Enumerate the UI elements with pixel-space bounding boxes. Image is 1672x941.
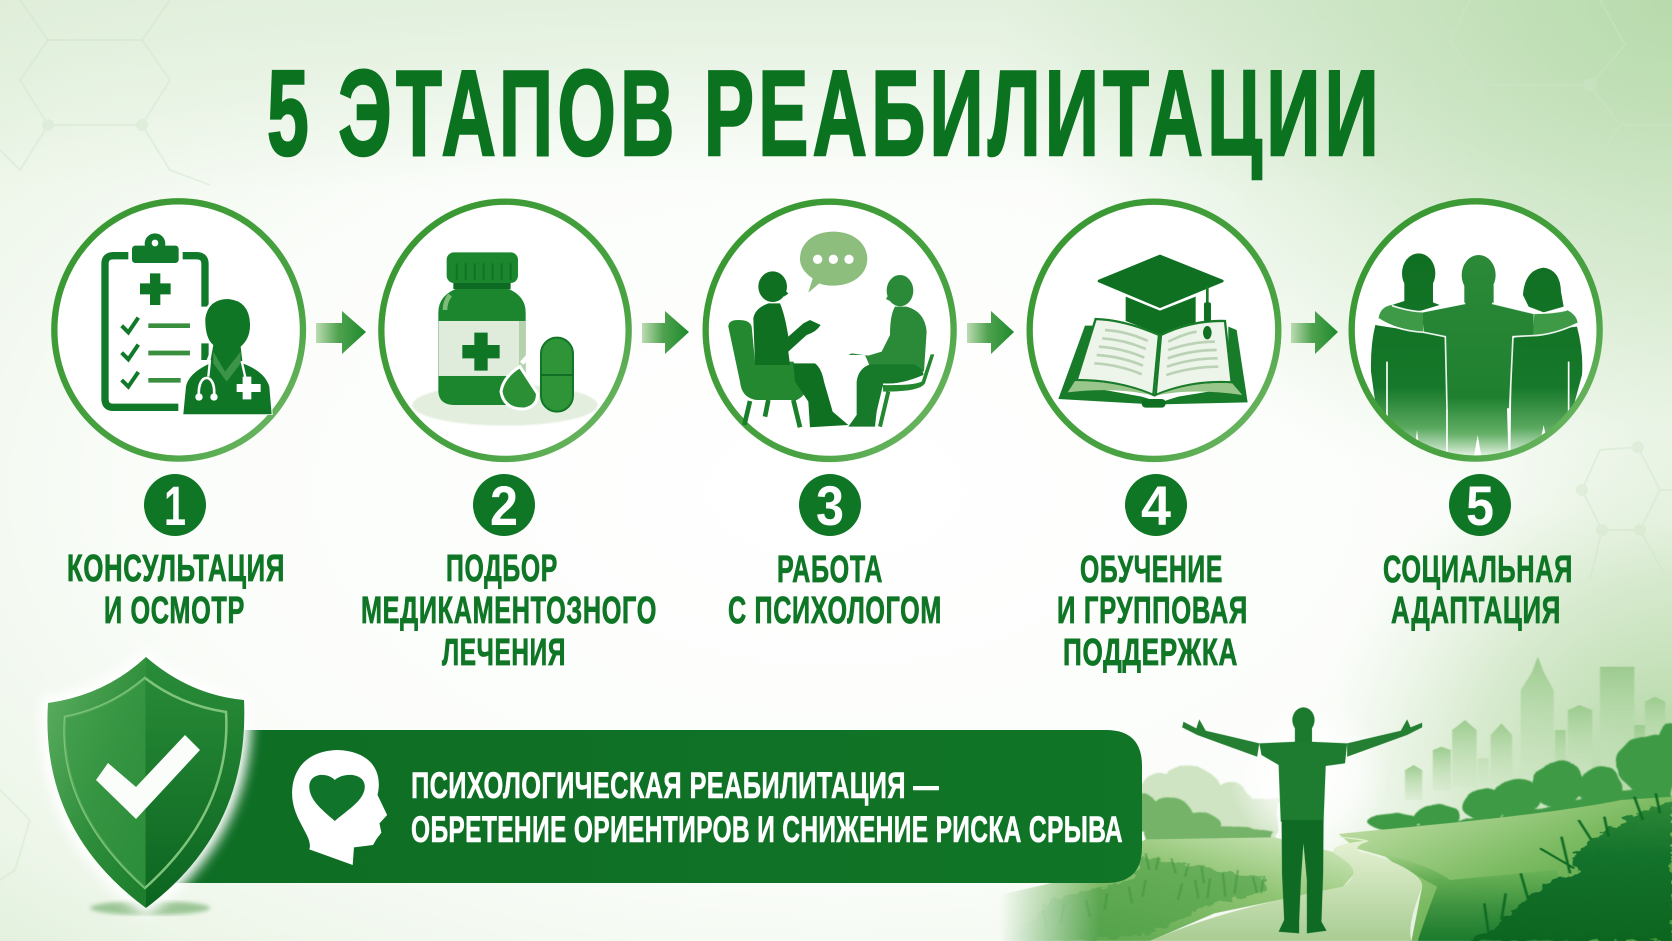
icon: three people embracing [1352,201,1600,462]
label: step 4: И ГРУППОВАЯ [1057,590,1248,632]
label: step 3 [728,549,942,632]
arrow 2 [642,311,689,354]
label: step 1: И ОСМОТР [104,590,245,632]
step 2: medication [361,202,657,674]
callout text [411,765,1123,850]
number badge 2: 2 [490,474,518,537]
number badge 2 [473,474,535,537]
number badge 3 [799,474,861,537]
icon: graduation cap and book [1030,202,1278,459]
arrow 1 [316,311,366,354]
banner background [172,730,1142,883]
far trees left [1139,765,1279,843]
label: step 2: ЛЕЧЕНИЯ [442,632,566,674]
winding path [1150,837,1422,941]
number badge 1 [144,474,206,537]
icon: pill bottle and capsules [381,202,629,459]
icon: clipboard and doctor [54,201,303,459]
landscape: person on path with city skyline [979,657,1672,941]
step 3: psychologist [706,202,954,632]
number badge 4 [1125,474,1187,537]
arrow 3 [967,311,1014,354]
callout text: ПСИХОЛОГИЧЕСКАЯ РЕАБИЛИТАЦИЯ — [411,765,939,806]
label: step 2: ПОДБОР [446,548,558,590]
label: step 4 [1057,549,1248,674]
number badge 5 [1449,474,1511,537]
number badge 1: 1 [164,474,186,537]
bushes lower right [1471,800,1672,941]
person with raised arms [1182,707,1422,933]
icon: shield with check mark [47,657,244,915]
tree line right [1356,723,1672,840]
label: step 5: СОЦИАЛЬНАЯ [1383,549,1573,591]
grass along path right [1377,853,1566,941]
callout banner [172,730,1142,883]
grass left [1009,857,1266,941]
tree line left [1142,792,1274,840]
hill right [1339,797,1672,941]
arrow 4 [1291,311,1338,354]
hill left [979,837,1358,941]
sun glow [1236,742,1366,837]
callout text: ОБРЕТЕНИЕ ОРИЕНТИРОВ И СНИЖЕНИЕ РИСКА СРЫВА [411,809,1123,850]
step 1: consultation [54,201,303,632]
label: step 5 [1383,549,1573,632]
icon: two people talking [706,202,954,459]
step 5: social adaptation [1352,201,1600,632]
number badge 4: 4 [1141,474,1171,537]
label: step 3: РАБОТА [777,549,883,591]
label: step 1: КОНСУЛЬТАЦИЯ [67,548,285,590]
icon: head with heart [292,750,387,865]
number badge 3: 3 [816,474,844,537]
label: step 5: АДАПТАЦИЯ [1391,590,1561,632]
city skyline [1405,657,1665,800]
label: step 3: С ПСИХОЛОГОМ [728,590,942,632]
number badge 5: 5 [1466,474,1494,537]
label: step 4: ПОДДЕРЖКА [1063,632,1238,674]
step 4: education and group support [1030,202,1278,674]
label: step 2: МЕДИКАМЕНТОЗНОГО [361,590,657,632]
label: step 2 [361,548,657,674]
label: step 4: ОБУЧЕНИЕ [1080,549,1223,591]
label: step 1 [67,548,285,632]
